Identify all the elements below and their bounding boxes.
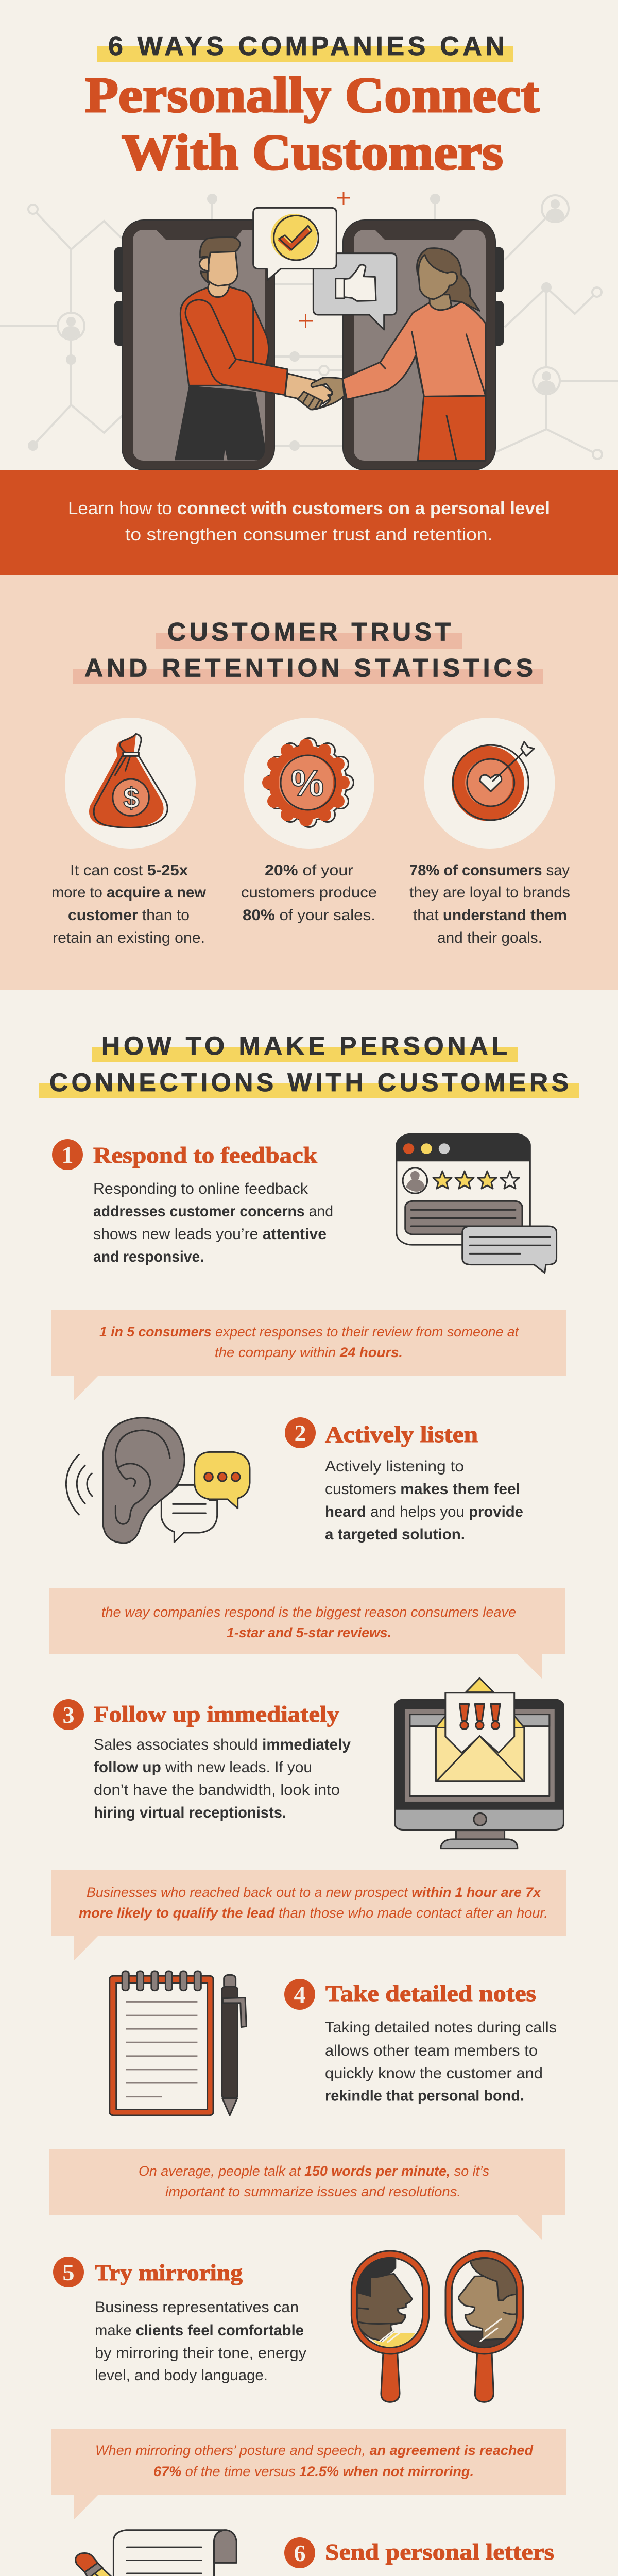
- right phone: [343, 220, 504, 470]
- stat 2 text: 20% of your: [265, 862, 353, 879]
- heading 3: Follow up immediately: [94, 1702, 339, 1727]
- header title block: [85, 31, 539, 180]
- step 2: actively listen: [66, 1417, 523, 1543]
- body 1: and responsive.: [93, 1248, 204, 1265]
- statistics heading: [73, 617, 543, 684]
- callout 5: When mirroring others’ posture and speech, an agreement is reached: [95, 2443, 534, 2458]
- callout 3: Businesses who reached back out to a new prospect within 1 hour are 7x: [87, 1885, 541, 1900]
- badge 4: 4: [294, 1981, 306, 2008]
- icon: ear with speech bubbles: [66, 1418, 250, 1543]
- callout 4: [49, 2149, 565, 2240]
- stat 1: money bag: [65, 718, 196, 849]
- intro band: [0, 470, 618, 575]
- body 3: don’t have the bandwidth, look into: [94, 1782, 340, 1799]
- badge 1: 1: [62, 1142, 73, 1168]
- body 4: quickly know the customer and: [325, 2065, 543, 2082]
- section heading: how to: [39, 1031, 579, 1098]
- stat 1 text: It can cost 5-25x: [70, 862, 188, 879]
- callout 4: important to summarize issues and resolutions.: [165, 2184, 461, 2199]
- body 5: make clients feel comfortable: [95, 2322, 304, 2339]
- heading 6: Send personal letters: [325, 2539, 554, 2565]
- left phone: [114, 220, 274, 470]
- stat 3: target: [424, 718, 555, 849]
- badge 5: 5: [63, 2259, 74, 2285]
- badge 2: [285, 1417, 316, 1448]
- body 3: follow up with new leads. If you: [94, 1759, 312, 1776]
- badge 2: 2: [295, 1420, 306, 1446]
- stat 2 text: 80% of your sales.: [243, 907, 375, 924]
- stat 2: percent badge: %: [291, 763, 324, 804]
- body 3: hiring virtual receptionists.: [94, 1804, 286, 1821]
- icon: letter and pencil: [76, 2530, 236, 2576]
- panel: statistics: [0, 575, 618, 990]
- badge 3: 3: [63, 1702, 74, 1728]
- callout 5: [52, 2429, 566, 2520]
- network background pattern: [0, 195, 618, 459]
- callout 1: [52, 1310, 566, 1401]
- eyebrow title: 6 WAYS COMPANIES CAN: [108, 31, 505, 61]
- stat 3 text: [409, 862, 570, 946]
- section heading: how to: HOW TO MAKE PERSONAL: [101, 1031, 507, 1060]
- intro text line 1: Learn how to connect with customers on a personal level: [68, 499, 550, 518]
- plus sign upper: [337, 192, 350, 205]
- body 3: Sales associates should immediately: [94, 1736, 351, 1753]
- stat 2 text: customers produce: [241, 884, 377, 901]
- step 5: try mirroring: [53, 2251, 523, 2402]
- callout 3: more likely to qualify the lead than those who made contact after an hour.: [79, 1905, 548, 1921]
- man figure: [175, 238, 287, 460]
- badge 3: [53, 1699, 84, 1730]
- body 2: [325, 1458, 523, 1543]
- speech bubble: thumbs up: [313, 253, 397, 330]
- badge 4: [284, 1979, 315, 2010]
- body 4: rekindle that personal bond.: [325, 2088, 524, 2104]
- stat 2 text: [241, 862, 377, 924]
- callout 2: [49, 1588, 565, 1679]
- body 5: level, and body language.: [95, 2367, 268, 2384]
- callout 1: the company within 24 hours.: [215, 1345, 403, 1360]
- stat 1 text: more to acquire a new: [52, 884, 207, 901]
- stat 2: percent badge: [244, 718, 374, 849]
- intro text line 2: to strengthen consumer trust and retention.: [125, 525, 493, 545]
- body 2: Actively listening to: [325, 1458, 464, 1475]
- plus sign lower: [299, 314, 313, 328]
- stat 3 text: and their goals.: [437, 929, 542, 946]
- body 1: shows new leads you’re attentive: [93, 1226, 327, 1243]
- stat 1 text: customer than to: [68, 907, 190, 924]
- callout 4: On average, people talk at 150 words per minute, so it’s: [139, 2163, 489, 2179]
- stat 1 text: retain an existing one.: [53, 929, 205, 946]
- body 3: [94, 1736, 351, 1821]
- body 5: Business representatives can: [95, 2299, 299, 2316]
- stat 3 text: that understand them: [413, 907, 567, 924]
- step 3: follow up immediately: [53, 1678, 563, 1849]
- heading 2: Actively listen: [325, 1422, 478, 1447]
- body 4: Taking detailed notes during calls: [325, 2019, 557, 2036]
- heading 1: Respond to feedback: [93, 1143, 318, 1168]
- icon: monitor with envelope: [395, 1678, 563, 1849]
- stat 3 text: 78% of consumers say: [409, 862, 570, 879]
- title highlight bar: [97, 46, 513, 62]
- stat 1 text: [52, 862, 207, 946]
- section heading: how to: CONNECTIONS WITH CUSTOMERS: [49, 1068, 569, 1097]
- body 1: Responding to online feedback: [93, 1180, 308, 1197]
- callout 3: [52, 1870, 566, 1961]
- callout 5: 67% of the time versus 12.5% when not mirroring.: [153, 2464, 474, 2479]
- body 2: heard and helps you provide: [325, 1503, 523, 1520]
- stat 3 text: they are loyal to brands: [409, 884, 570, 901]
- callout 2: the way companies respond is the biggest reason consumers leave: [101, 1604, 516, 1620]
- callout 1: 1 in 5 consumers expect responses to their review from someone at: [99, 1324, 520, 1340]
- body 1: [93, 1180, 333, 1265]
- badge 5: [53, 2257, 84, 2287]
- body 2: a targeted solution.: [325, 1526, 465, 1543]
- step 6: send personal letters: [76, 2530, 558, 2576]
- icon: notepad and pen: [110, 1971, 246, 2115]
- icon: two mirrors with faces: [351, 2251, 523, 2402]
- badge 6: 6: [294, 2540, 306, 2566]
- woman figure: [342, 248, 486, 461]
- callout 2: 1-star and 5-star reviews.: [227, 1625, 391, 1640]
- body 5: [95, 2299, 306, 2384]
- body 1: addresses customer concerns and: [93, 1203, 333, 1220]
- badge 1: [52, 1139, 83, 1170]
- body 4: allows other team members to: [325, 2042, 538, 2059]
- body 5: by mirroring their tone, energy: [95, 2345, 306, 2362]
- body 2: customers makes them feel: [325, 1481, 520, 1498]
- statistics heading: AND RETENTION STATISTICS: [84, 653, 533, 682]
- badge 6: [284, 2537, 315, 2568]
- icon: review window: [397, 1134, 557, 1273]
- handshake: [285, 374, 344, 410]
- stat 1: money bag: $: [123, 782, 140, 814]
- body 4: [325, 2019, 557, 2104]
- step 4: take detailed notes: [110, 1971, 557, 2115]
- heading 5: Try mirroring: [95, 2260, 243, 2285]
- heading 4: Take detailed notes: [325, 1981, 536, 2006]
- step 1: respond to feedback: [52, 1134, 557, 1273]
- main title line 1: Personally Connect: [85, 67, 539, 123]
- statistics heading: CUSTOMER TRUST: [167, 617, 451, 646]
- speech bubble: checkmark: [253, 208, 336, 280]
- main title line 2: With Customers: [122, 125, 503, 180]
